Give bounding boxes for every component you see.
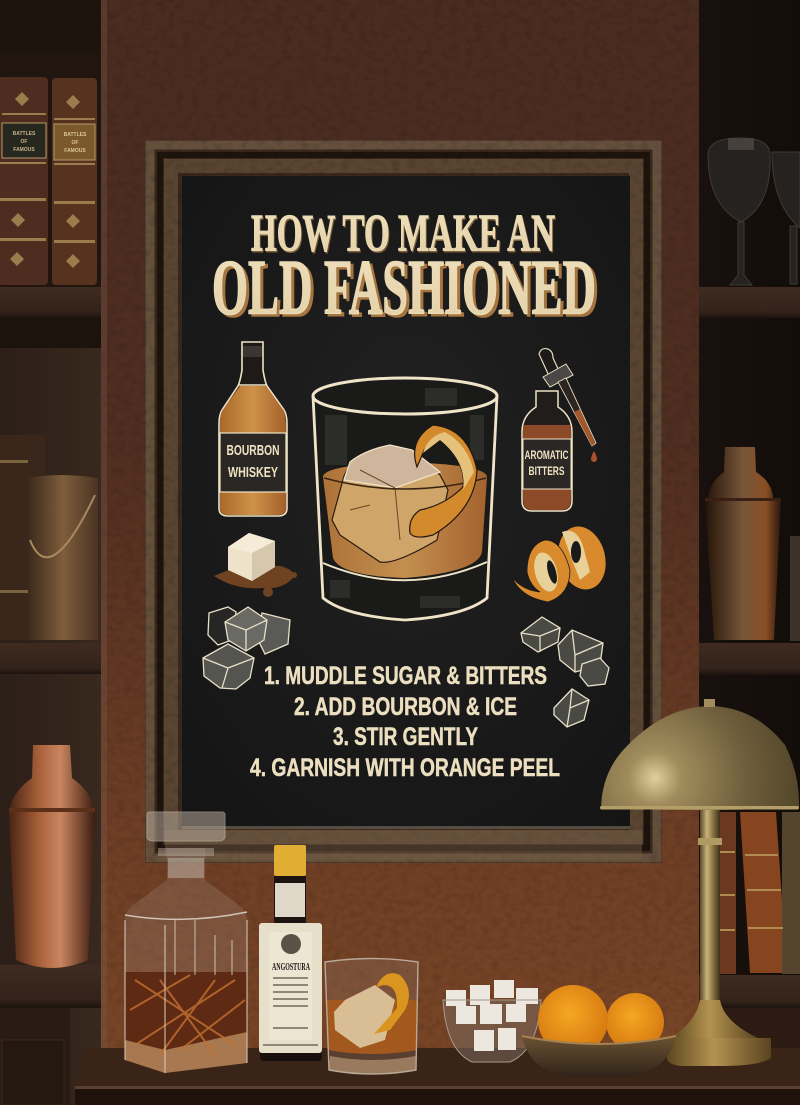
brass table lamp	[600, 699, 799, 1066]
bottom board edge highlight	[182, 826, 630, 829]
icon: aromatic bitters bottle with dropper	[522, 349, 597, 511]
book spine labels: BATTLES	[64, 132, 87, 138]
bitters label	[523, 439, 571, 489]
step 1: 1. MUDDLE SUGAR & BITTERS	[264, 662, 547, 690]
books behind lamp	[718, 812, 800, 974]
bowl of sugar cubes	[443, 980, 541, 1062]
glass smudges	[325, 388, 484, 608]
bottle label: BOURBON	[226, 442, 280, 459]
lower left books and tin	[0, 435, 98, 640]
right coil	[552, 521, 612, 595]
bitters label: BITTERS	[528, 464, 564, 478]
right bookcase background	[696, 0, 800, 1105]
chalkboard	[182, 176, 630, 828]
right shelves	[699, 287, 800, 1048]
dropper	[539, 349, 597, 462]
step 4: 4. GARNISH WITH ORANGE PEEL	[250, 754, 560, 782]
left bookcase background	[0, 0, 102, 1105]
ice cube	[332, 445, 448, 562]
wine glasses right	[708, 138, 800, 285]
wooden picture frame	[145, 140, 662, 863]
step 2: 2. ADD BOURBON & ICE	[294, 693, 517, 721]
icon: orange peel curls	[512, 521, 612, 602]
title	[212, 204, 599, 333]
wooden bar table	[72, 1048, 800, 1105]
icon: bourbon whiskey bottle	[219, 342, 287, 516]
book spine labels: FAMOUS	[13, 147, 35, 153]
left shelves	[0, 0, 101, 1105]
glass outline	[313, 378, 497, 620]
step 3: 3. STIR GENTLY	[333, 723, 478, 751]
drink	[323, 463, 487, 578]
title line 1: HOW TO MAKE AN	[252, 206, 556, 264]
bottle label: WHISKEY	[228, 464, 278, 481]
icon: sugar cube with bitters puddle	[214, 533, 297, 597]
real cocktail in rocks glass	[325, 958, 418, 1074]
angostura bitters bottle: ANGOSTURA	[272, 962, 310, 973]
upper left books	[0, 77, 97, 285]
recipe steps	[250, 662, 560, 782]
copper shaker left	[9, 745, 95, 968]
title line 2	[212, 244, 599, 333]
left coil	[512, 540, 570, 602]
book spine labels	[2, 123, 95, 160]
leather wall panel	[101, 0, 699, 1105]
title line 1	[251, 204, 556, 264]
icon: old fashioned glass	[313, 378, 497, 620]
title line 1: HOW TO MAKE AN	[251, 204, 555, 262]
book spine labels: FAMOUS	[64, 148, 86, 154]
book spine labels: BATTLES	[13, 131, 36, 137]
bitters label: AROMATIC	[524, 448, 569, 462]
book spine labels: OF	[21, 139, 27, 145]
angostura bitters bottle	[259, 845, 322, 1061]
cocktail shaker right	[705, 447, 800, 641]
orange peel garnish	[410, 425, 477, 537]
book spine labels: OF	[72, 140, 78, 146]
frame outer moulding	[150, 145, 657, 858]
bottle label	[220, 433, 286, 492]
icon: ice cubes right	[521, 617, 609, 727]
crystal decanter	[125, 812, 247, 1073]
icon: ice cubes left	[203, 607, 290, 689]
stopper	[147, 812, 225, 878]
oranges on wooden dish	[522, 985, 676, 1077]
